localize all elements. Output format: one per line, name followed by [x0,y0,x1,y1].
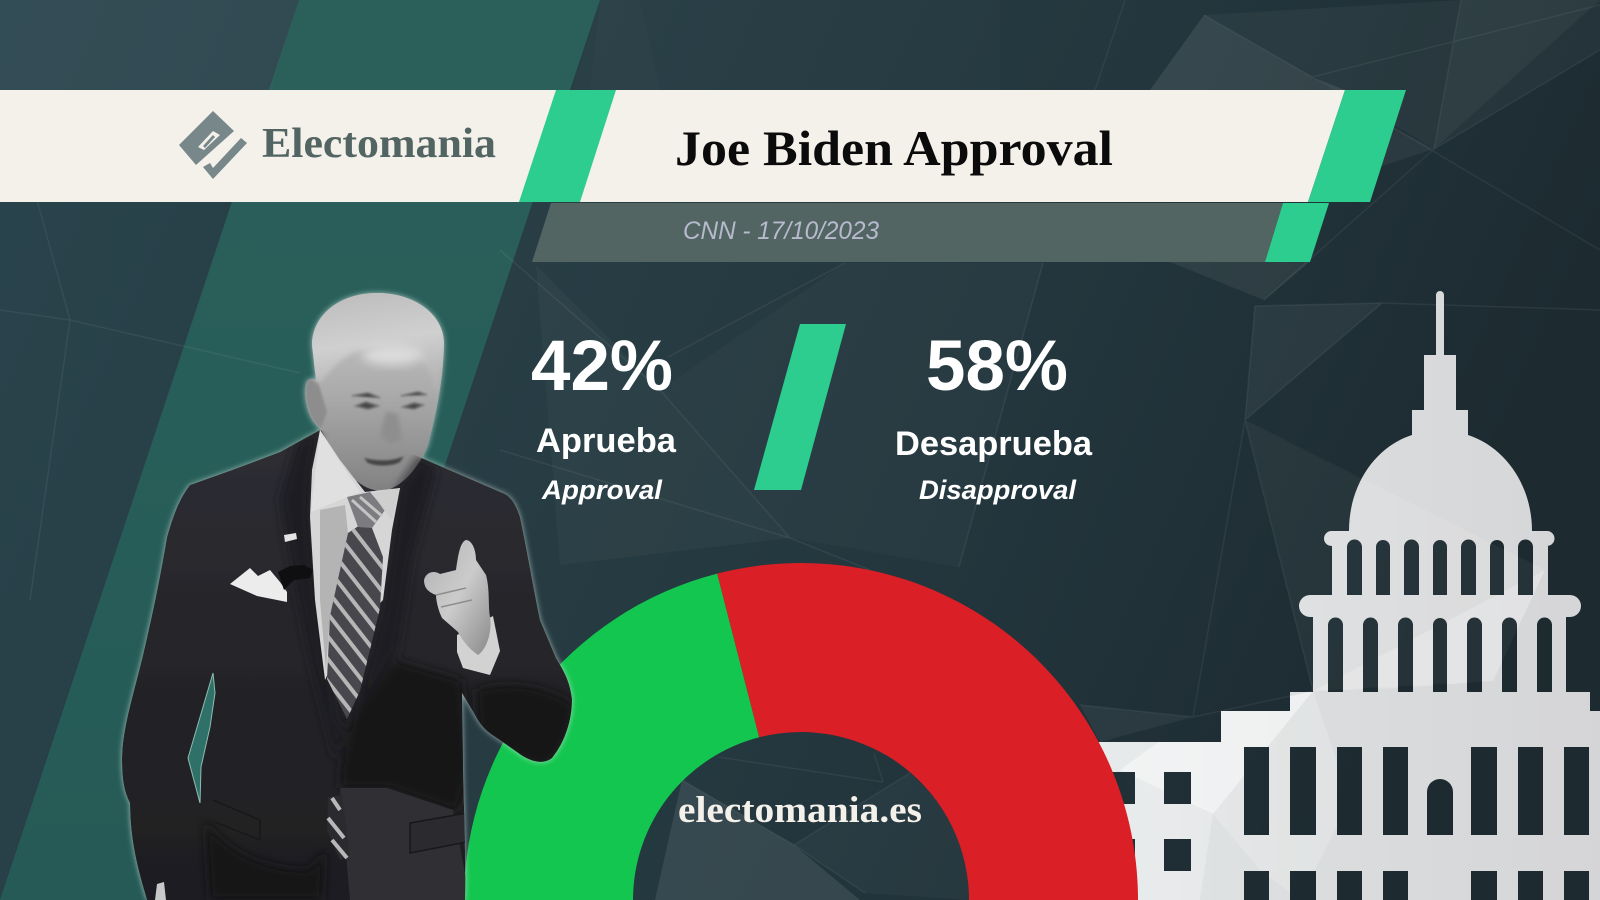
gap between arm and torso [188,673,215,803]
hair [312,293,444,384]
semicircular approval chart [464,563,1138,900]
tie [327,492,384,719]
jaw shadow [350,464,418,478]
header banner [0,90,1406,202]
result: approval [531,327,677,505]
approval label spanish: Aprueba [536,422,677,460]
source text: CNN - 17/10/2023 [683,217,879,245]
disapproval label english: Disapproval [919,475,1076,505]
approval label english: Approval [541,475,662,505]
head details [305,285,446,488]
mouth [364,456,404,466]
banner end accent [1308,90,1406,202]
teal diagonal band [0,0,600,900]
title: Joe Biden Approval [675,120,1113,176]
jacket shading [205,430,575,900]
ear [305,378,327,428]
chart site label: electomania.es [678,790,922,831]
lower tie section [327,795,350,860]
pocket square [230,568,287,602]
disapproval percentage: 58% [926,327,1068,406]
banner accent [519,90,616,202]
silhouette with halo [122,293,572,900]
lower jacket panel [340,788,470,900]
subtitle accent [1265,203,1329,262]
lapel pin [284,533,297,542]
capitol light mesh overlay [1075,420,1545,900]
shirt cuff [457,616,500,675]
result: disapproval [895,327,1093,505]
shirt shading [320,505,348,670]
disapproval label spanish: Desaprueba [895,425,1093,463]
logo mark [179,111,247,179]
lapel microphone [278,565,313,590]
capitol building illustration [1075,285,1600,900]
arc: approve 42% [464,574,759,900]
forehead highlight [362,345,422,365]
shirt [310,430,400,680]
nose [382,412,400,440]
approval percentage: 42% [531,327,673,406]
left eye and brow [352,393,380,409]
jacket pocket flap [410,813,467,853]
divider slash [754,324,846,490]
portrait: Joe Biden [122,285,575,900]
source subtitle bar [532,203,1329,262]
left pocket seam [213,800,260,840]
arc: disapprove 58% [717,563,1138,900]
collar [311,430,400,520]
right eye and brow [401,392,427,409]
pointing hand [424,540,490,655]
brand name: Electomania [262,121,496,167]
hand in pocket cuff [155,882,166,900]
tie knot [347,492,385,528]
